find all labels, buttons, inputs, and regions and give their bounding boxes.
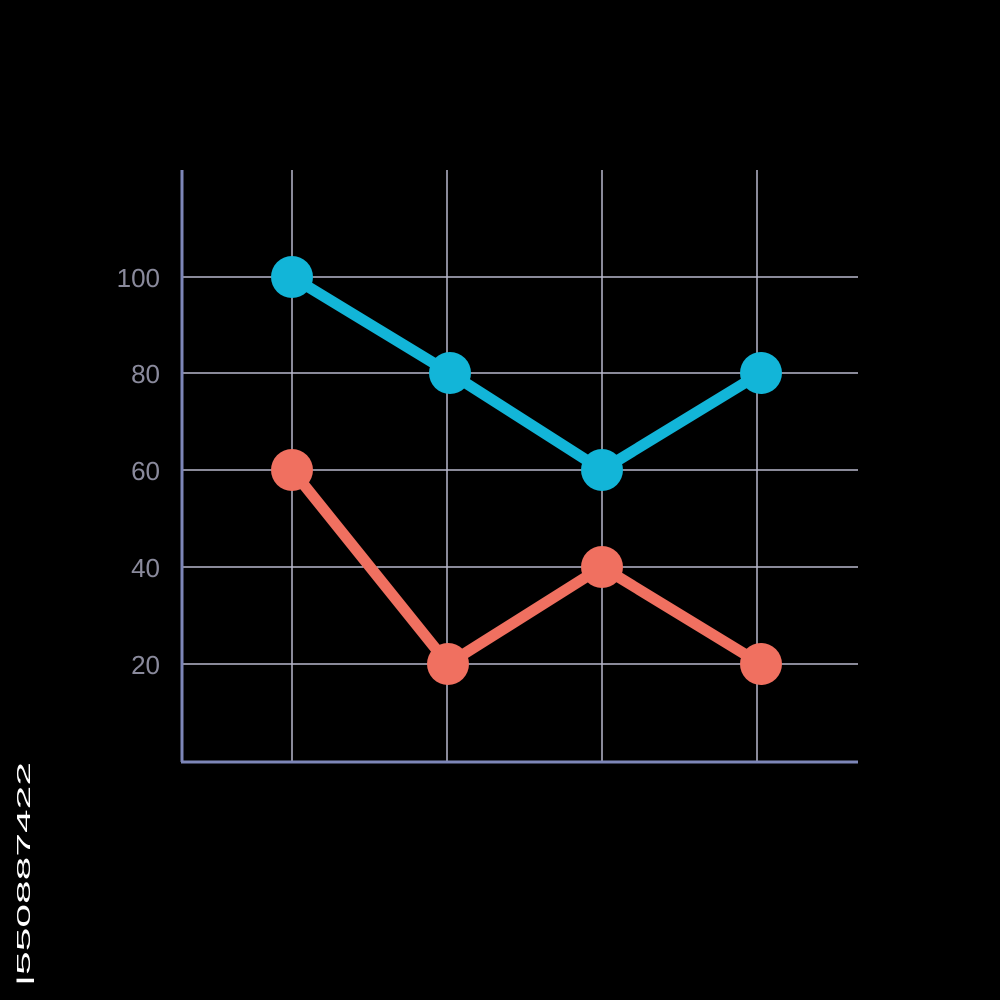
watermark id text: |550887422 (14, 762, 34, 986)
grid lines (182, 170, 858, 762)
series: blue (271, 256, 782, 491)
y-axis labels: 20 (131, 650, 160, 680)
y-axis labels: 100 (117, 263, 160, 293)
y-axis labels (117, 263, 160, 680)
y-axis labels: 60 (131, 456, 160, 486)
series: coral (271, 449, 782, 685)
y-axis labels: 80 (131, 359, 160, 389)
y-axis labels: 40 (131, 553, 160, 583)
axes (181, 170, 858, 762)
